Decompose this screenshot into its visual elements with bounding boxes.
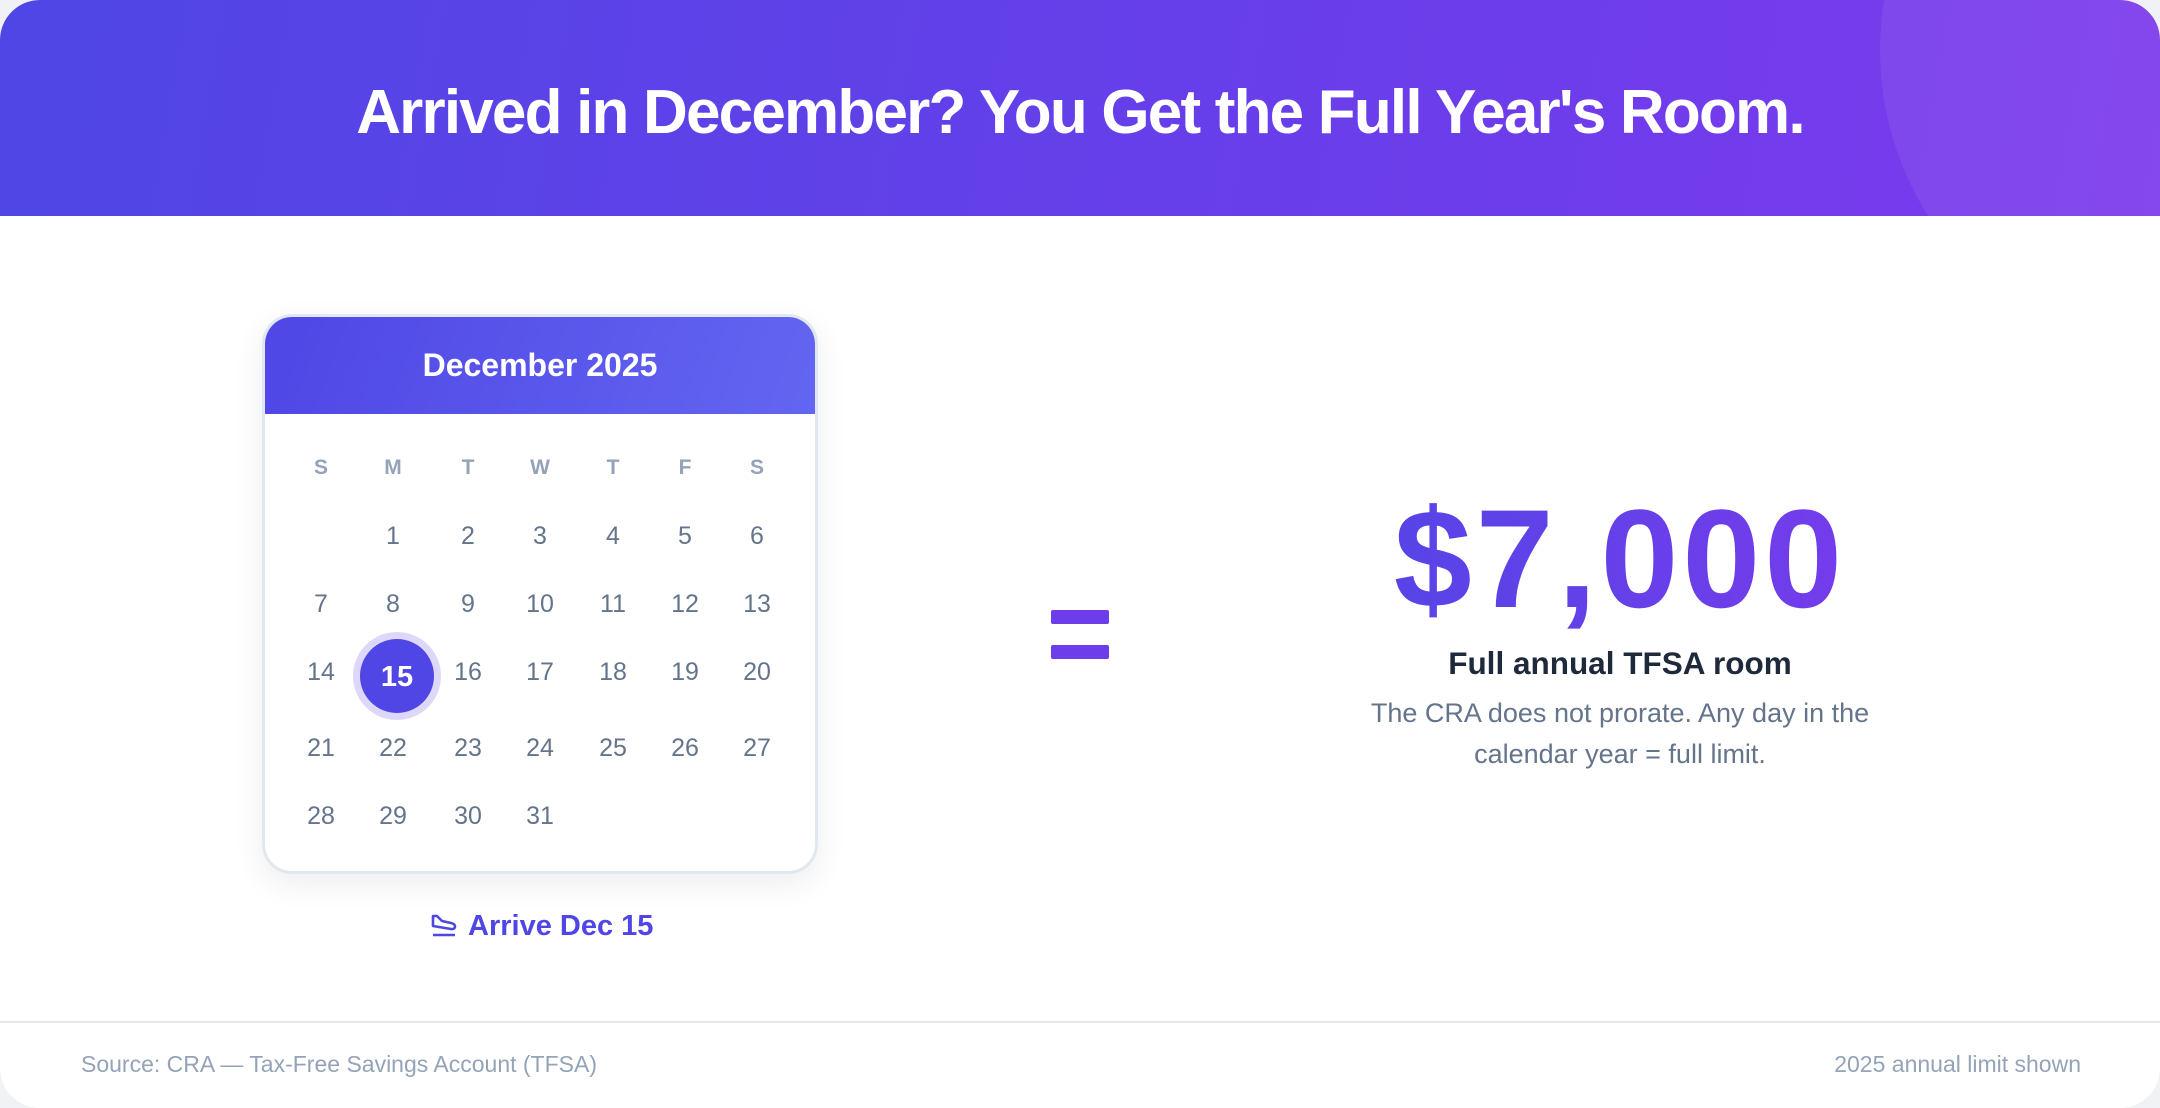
amount label: Full annual TFSA room: [1448, 645, 1792, 681]
calendar days: 23: [454, 734, 482, 762]
calendar days: 21: [307, 734, 335, 762]
highlighted day 15: 15: [381, 661, 413, 693]
calendar days: 26: [671, 734, 699, 762]
description: [1371, 698, 1869, 769]
calendar days: 22: [379, 734, 407, 762]
calendar days: T: [462, 456, 474, 479]
calendar: [262, 314, 818, 874]
big amount: [1270, 484, 1970, 634]
calendar days: 18: [599, 658, 627, 686]
calendar header: [265, 317, 815, 414]
calendar days: 6: [750, 522, 764, 550]
calendar days: 24: [526, 734, 554, 762]
big amount: $7,000: [1394, 480, 1846, 637]
calendar days: 5: [678, 522, 692, 550]
calendar days: 14: [307, 658, 335, 686]
arrival label: Arrive Dec 15: [468, 910, 653, 942]
calendar days: 28: [307, 802, 335, 830]
calendar days: 31: [526, 802, 554, 830]
calendar days: T: [607, 456, 619, 479]
calendar days: 17: [526, 658, 554, 686]
calendar days: 8: [386, 590, 400, 618]
calendar days: 3: [533, 522, 547, 550]
calendar days: M: [384, 456, 402, 479]
highlighted day 15: [353, 632, 441, 720]
calendar days: 12: [671, 590, 699, 618]
calendar days: S: [314, 456, 328, 479]
calendar days: 1: [386, 522, 400, 550]
calendar days: 16: [454, 658, 482, 686]
calendar days: 7: [314, 590, 328, 618]
equals sign: [1051, 610, 1109, 659]
calendar days: 9: [461, 590, 475, 618]
calendar days: F: [679, 456, 691, 479]
calendar days: 2: [461, 522, 475, 550]
calendar days: 29: [379, 802, 407, 830]
calendar days: [307, 456, 771, 830]
icon: plane landing: [432, 914, 456, 936]
calendar days: 30: [454, 802, 482, 830]
calendar days: 19: [671, 658, 699, 686]
calendar days: 10: [526, 590, 554, 618]
description: The CRA does not prorate. Any day in the: [1371, 698, 1869, 728]
footer source: Source: CRA — Tax-Free Savings Account (TFSA): [81, 1051, 597, 1077]
footer note: 2025 annual limit shown: [1834, 1051, 2081, 1077]
calendar days: 13: [743, 590, 771, 618]
calendar days: 4: [606, 522, 620, 550]
description: calendar year = full limit.: [1474, 739, 1766, 769]
header banner: [0, 0, 2160, 216]
calendar days: 27: [743, 734, 771, 762]
calendar days: S: [750, 456, 764, 479]
calendar days: 25: [599, 734, 627, 762]
calendar days: 20: [743, 658, 771, 686]
calendar header: December 2025: [423, 347, 657, 383]
title: Arrived in December? You Get the Full Year's Room.: [356, 78, 1804, 147]
calendar days: W: [530, 456, 550, 479]
calendar days: 11: [600, 590, 626, 618]
